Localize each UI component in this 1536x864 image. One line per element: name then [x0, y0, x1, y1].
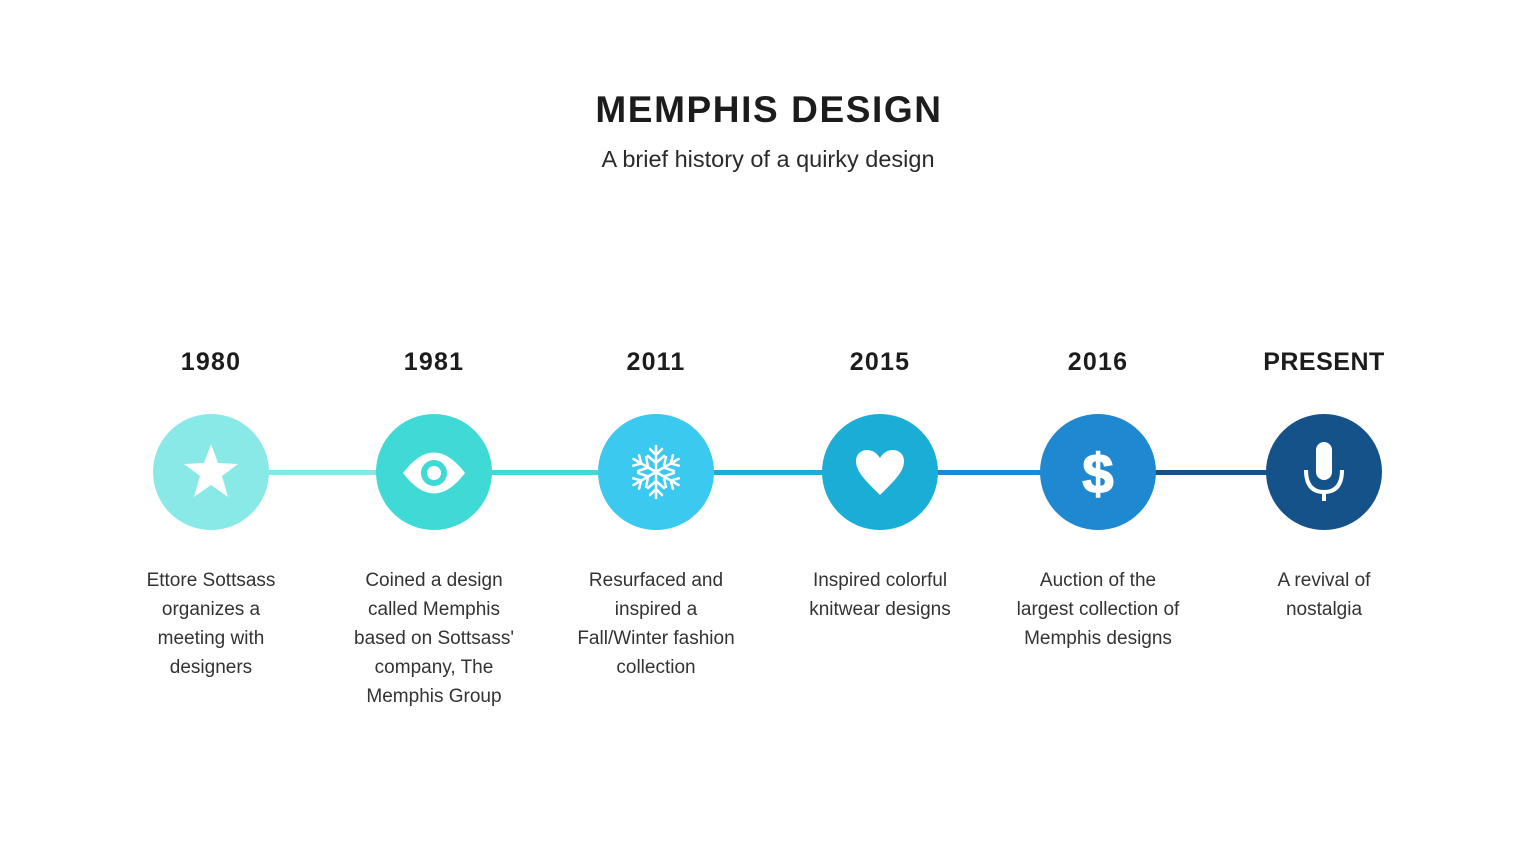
milestone 1981: based on Sottsass'	[354, 628, 514, 649]
milestone 2015: Inspired colorful	[813, 570, 947, 591]
milestone 1980: organizes a	[162, 599, 261, 620]
milestone 1980: 1980	[181, 348, 241, 376]
title: MEMPHIS DESIGN	[595, 89, 943, 130]
milestone 2015	[809, 348, 951, 620]
milestone 2011: 2011	[626, 348, 686, 376]
milestone present: PRESENT	[1263, 348, 1385, 376]
milestone 1981	[354, 348, 514, 707]
icon: heart	[822, 414, 938, 530]
milestone 2015: 2015	[850, 348, 910, 376]
milestone present: nostalgia	[1286, 599, 1362, 620]
icon: snowflake	[598, 414, 714, 530]
milestone 1981: company, The	[375, 657, 493, 678]
icon: dollar: $	[1082, 442, 1114, 505]
milestone 2016: Memphis designs	[1024, 628, 1172, 649]
milestone 2011: Fall/Winter fashion	[577, 628, 735, 649]
milestone 2011: Resurfaced and	[589, 570, 723, 591]
milestone present: A revival of	[1278, 570, 1371, 591]
milestone 2016: largest collection of	[1017, 599, 1180, 620]
milestone 1981: called Memphis	[368, 599, 500, 620]
milestone 1981: Memphis Group	[366, 686, 502, 707]
milestone 2015: knitwear designs	[809, 599, 951, 620]
subtitle: A brief history of a quirky design	[601, 146, 935, 172]
milestone 1980: Ettore Sottsass	[147, 570, 275, 591]
milestone 1980: designers	[170, 657, 252, 678]
timeline connector	[211, 470, 1324, 475]
icon: dollar	[1040, 414, 1156, 530]
icon: star	[153, 414, 269, 530]
milestone present	[1263, 348, 1385, 620]
milestone 1981: 1981	[404, 348, 464, 376]
icon: microphone	[1266, 414, 1382, 530]
milestone 1980: meeting with	[158, 628, 264, 649]
milestone 2011	[577, 348, 735, 678]
milestone 1980	[147, 348, 275, 678]
milestone 1981: Coined a design	[365, 570, 503, 591]
milestone 2016: 2016	[1068, 348, 1128, 376]
milestone 2011: collection	[616, 657, 696, 678]
milestone 2011: inspired a	[615, 599, 698, 620]
icon: eye	[376, 414, 492, 530]
milestone 2016: Auction of the	[1040, 570, 1156, 591]
milestone 2016	[1017, 348, 1180, 649]
